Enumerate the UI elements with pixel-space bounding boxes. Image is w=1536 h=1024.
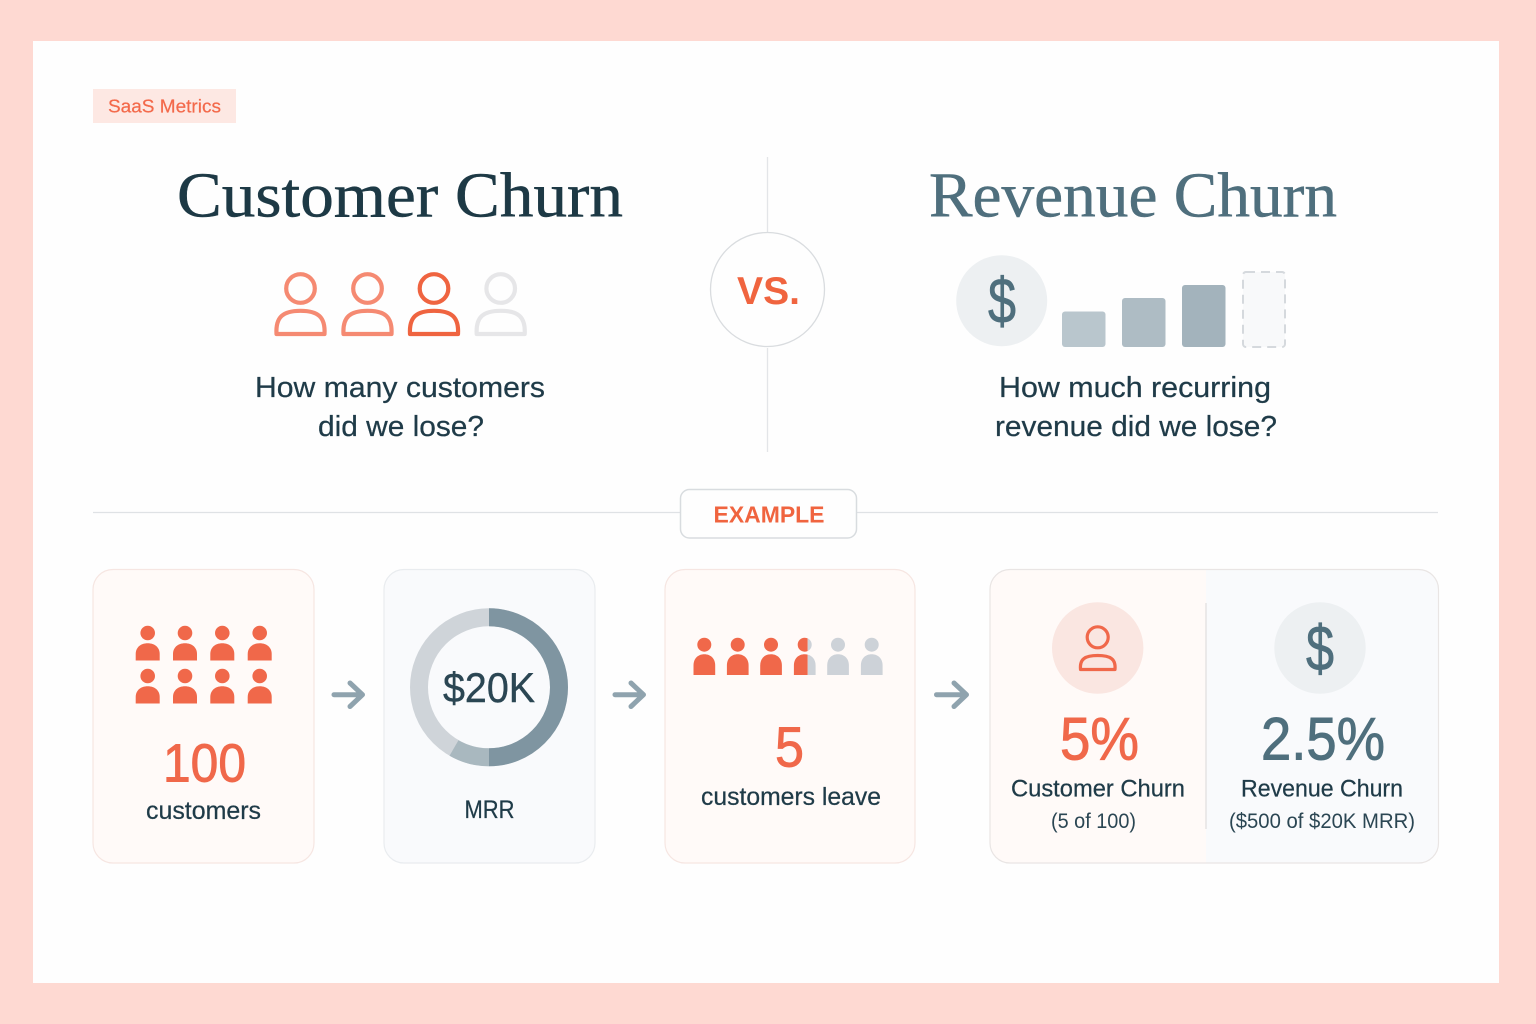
card: 100 customers bbox=[93, 570, 314, 863]
value 2.5%: 2.5% bbox=[1261, 706, 1385, 772]
icon row: four customers, outlined bbox=[276, 274, 525, 334]
label Customer Churn: Customer Churn bbox=[1011, 776, 1185, 802]
example label bbox=[680, 490, 856, 538]
vertical divider bottom bbox=[766, 348, 768, 452]
arrow 2 bbox=[615, 683, 644, 706]
icon: customer bbox=[1052, 602, 1143, 694]
people grid bbox=[136, 626, 272, 704]
customer icon 1 bbox=[276, 274, 325, 334]
tag: SaaS Metrics: SaaS Metrics bbox=[108, 96, 221, 116]
title: Customer Churn: Customer Churn bbox=[177, 160, 623, 230]
people row, partly leaving bbox=[694, 638, 883, 675]
title: Revenue Churn: Revenue Churn bbox=[929, 160, 1337, 230]
question: revenue bbox=[995, 372, 1277, 443]
arrow 1 bbox=[334, 683, 362, 706]
label MRR: MRR bbox=[464, 796, 514, 824]
card: MRR bbox=[384, 570, 595, 863]
label Revenue Churn: Revenue Churn bbox=[1241, 776, 1403, 802]
note 5 of 100: (5 of 100) bbox=[1051, 810, 1136, 833]
bars: declining revenue bbox=[1062, 272, 1285, 347]
icon: dollar coin: $ bbox=[988, 265, 1016, 337]
example label: EXAMPLE bbox=[714, 502, 824, 528]
vertical divider top bbox=[766, 157, 768, 232]
tag: SaaS Metrics bbox=[93, 89, 236, 123]
result: customer churn bbox=[1011, 602, 1185, 833]
icon: dollar coin bbox=[956, 255, 1047, 346]
label customers leave: customers leave bbox=[701, 783, 881, 811]
number 100: 100 bbox=[163, 734, 246, 794]
question: revenue: revenue did we lose? bbox=[995, 411, 1277, 443]
card: 5 customers leave bbox=[665, 570, 915, 863]
donut value: $20K bbox=[443, 664, 535, 711]
question: customers: did we lose? bbox=[318, 411, 484, 443]
VS badge bbox=[710, 232, 824, 346]
question: revenue: How much recurring bbox=[999, 372, 1271, 404]
icon: dollar bbox=[1274, 602, 1366, 694]
donut chart bbox=[419, 617, 559, 757]
value 5%: 5% bbox=[1060, 706, 1139, 772]
icon: dollar: $ bbox=[1306, 612, 1334, 684]
arrow 3 bbox=[936, 683, 966, 706]
customer icon 2 bbox=[343, 274, 392, 334]
example divider left bbox=[93, 512, 681, 514]
customer icon 3 bbox=[410, 274, 458, 334]
card: results bbox=[990, 570, 1438, 863]
question: customers bbox=[255, 372, 545, 443]
example divider right bbox=[857, 512, 1438, 514]
note 500 of 20K MRR: ($500 of $20K MRR) bbox=[1229, 810, 1415, 833]
customer icon 4, lost bbox=[477, 274, 525, 334]
number 5: 5 bbox=[775, 716, 804, 780]
label customers: customers bbox=[146, 797, 261, 825]
result: revenue churn bbox=[1229, 602, 1415, 833]
VS badge: VS. bbox=[737, 270, 800, 313]
question: customers: How many customers bbox=[255, 372, 545, 404]
